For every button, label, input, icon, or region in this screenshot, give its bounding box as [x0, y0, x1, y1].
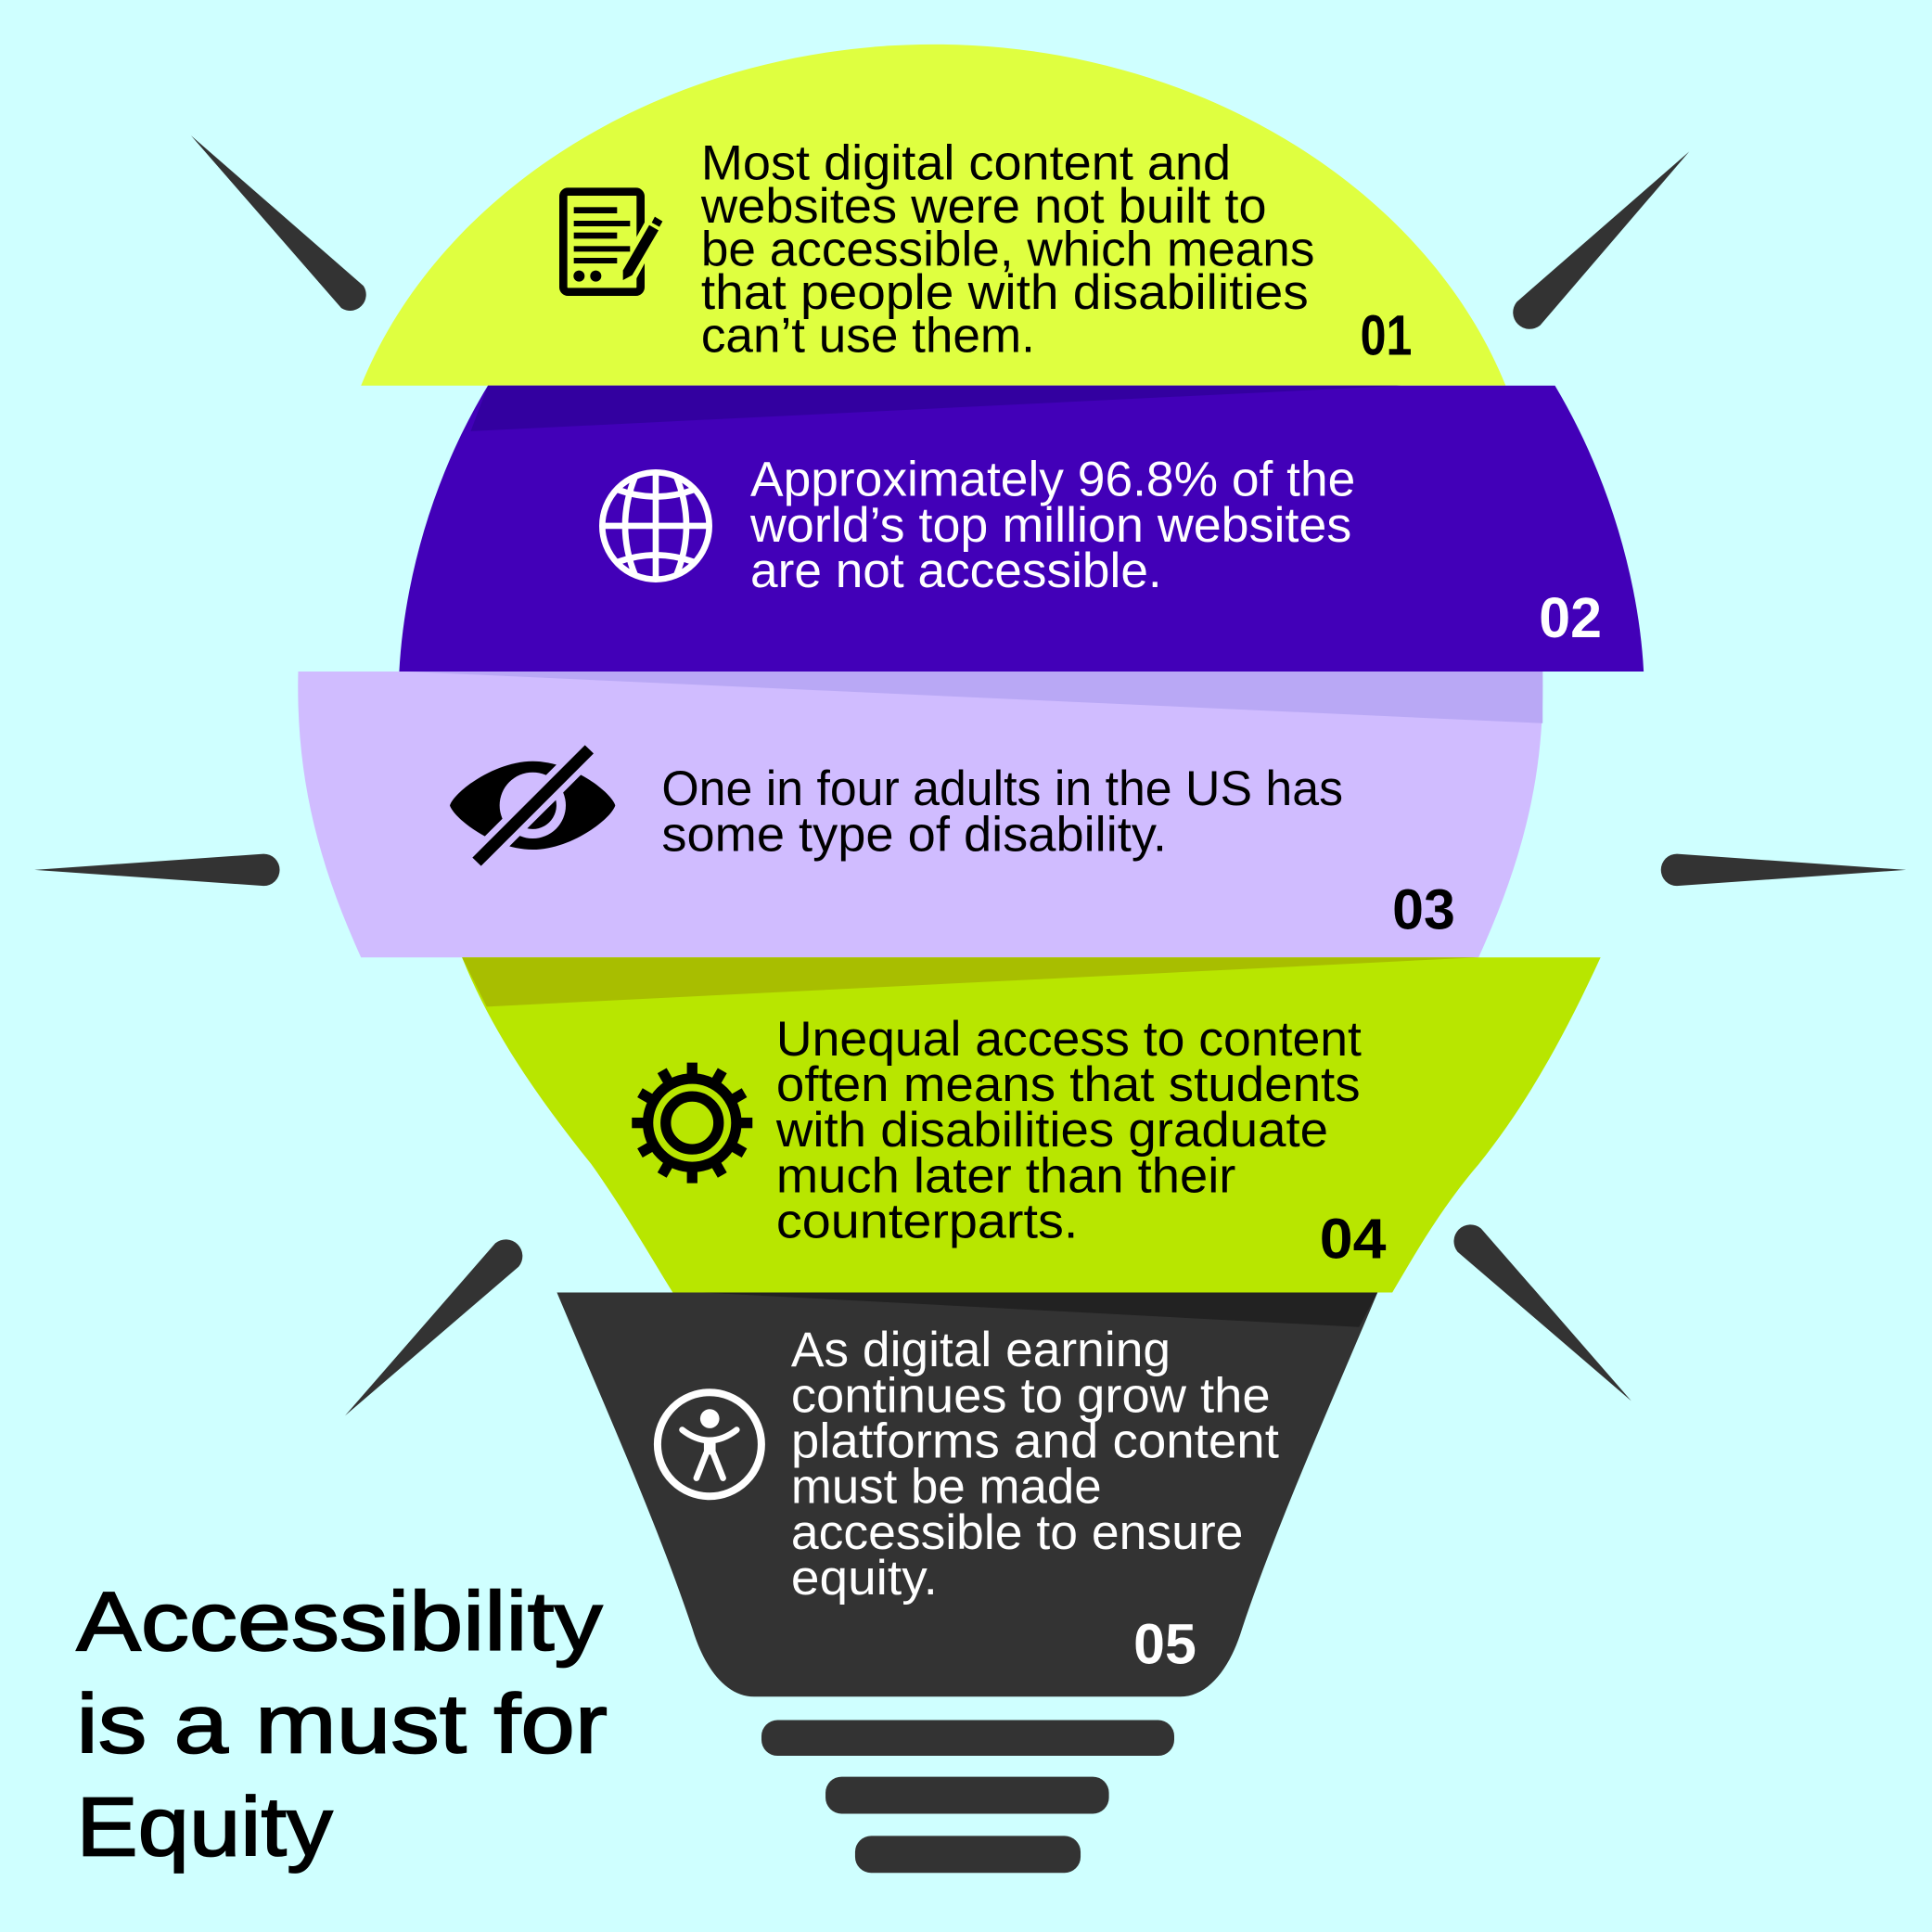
- text block 01: that people with disabilities: [701, 265, 1309, 320]
- rays around the bulb: [34, 135, 1906, 1415]
- text block 02: Approximately 96.8% of the: [750, 453, 1355, 507]
- icon: document and pencil: [563, 192, 670, 292]
- icon: crossed-out eye: [450, 745, 615, 866]
- ray: top right: [1513, 151, 1689, 329]
- band shape: [462, 957, 1601, 1293]
- text block 04: often means that students: [776, 1057, 1361, 1112]
- panel 05: bulb base: [557, 1293, 1377, 1696]
- panel 02: purple band: [399, 386, 1644, 672]
- text block 04: much later than their: [776, 1148, 1235, 1203]
- title: [76, 1575, 608, 1874]
- shadow wedge: [470, 386, 1401, 431]
- text block 02: world’s top million websites: [749, 498, 1351, 553]
- text block 04: Unequal access to content: [776, 1012, 1362, 1067]
- text block 05: equity.: [791, 1551, 938, 1606]
- thread 1: [761, 1721, 1174, 1756]
- text block 05: continues to grow the: [791, 1368, 1271, 1423]
- text block 04: with disabilities graduate: [775, 1103, 1328, 1158]
- number 04: 04: [1320, 1207, 1387, 1270]
- number 01: 01: [1361, 304, 1412, 367]
- title: is a must for: [76, 1678, 608, 1772]
- ray: right: [1661, 854, 1906, 886]
- text block 01: Most digital content and: [701, 135, 1231, 190]
- ray: left: [34, 854, 280, 886]
- band shape: [298, 672, 1542, 957]
- text block 01: websites were not built to: [700, 179, 1267, 234]
- text block 01: can’t use them.: [701, 308, 1035, 363]
- text block 05: As digital earning: [791, 1323, 1171, 1377]
- thread 3: [855, 1836, 1081, 1873]
- text block 03: [661, 761, 1343, 862]
- icon: globe: [602, 472, 710, 580]
- text block 01: be accessible, which means: [701, 222, 1314, 276]
- ray: bottom right: [1453, 1224, 1631, 1401]
- base shape: [557, 1293, 1377, 1696]
- thread 2: [825, 1777, 1109, 1813]
- dome shape: [361, 45, 1505, 386]
- text block 03: One in four adults in the US has: [661, 761, 1343, 816]
- text block 03: some type of disability.: [661, 807, 1167, 862]
- number 05: 05: [1133, 1612, 1196, 1675]
- text block 02: are not accessible.: [750, 544, 1162, 598]
- panel 01: dome: [361, 45, 1505, 386]
- title: Equity: [76, 1781, 333, 1874]
- text block 04: [775, 1012, 1362, 1248]
- bulb screw threads: [761, 1721, 1174, 1873]
- text block 05: must be made: [791, 1460, 1102, 1515]
- text block 04: counterparts.: [776, 1194, 1078, 1248]
- text block 05: platforms and content: [791, 1414, 1279, 1469]
- text block 05: accessible to ensure: [791, 1505, 1243, 1560]
- ray: bottom left: [345, 1239, 522, 1415]
- icon: accessibility figure: [658, 1392, 761, 1496]
- text block 02: [749, 453, 1355, 598]
- text block 05: [791, 1323, 1279, 1606]
- shadow wedge: [702, 1293, 1377, 1327]
- shadow wedge: [462, 957, 1478, 1006]
- band shape: [399, 386, 1644, 672]
- shadow wedge: [406, 672, 1542, 723]
- number 02: 02: [1539, 586, 1602, 649]
- title: Accessibility: [76, 1575, 603, 1669]
- text block 01: [700, 135, 1314, 363]
- panel 04: lime band: [462, 957, 1601, 1293]
- panel 03: lilac band: [298, 672, 1542, 957]
- icon: gear: [632, 1063, 752, 1184]
- ray: top left: [191, 135, 366, 311]
- number 03: 03: [1392, 878, 1455, 941]
